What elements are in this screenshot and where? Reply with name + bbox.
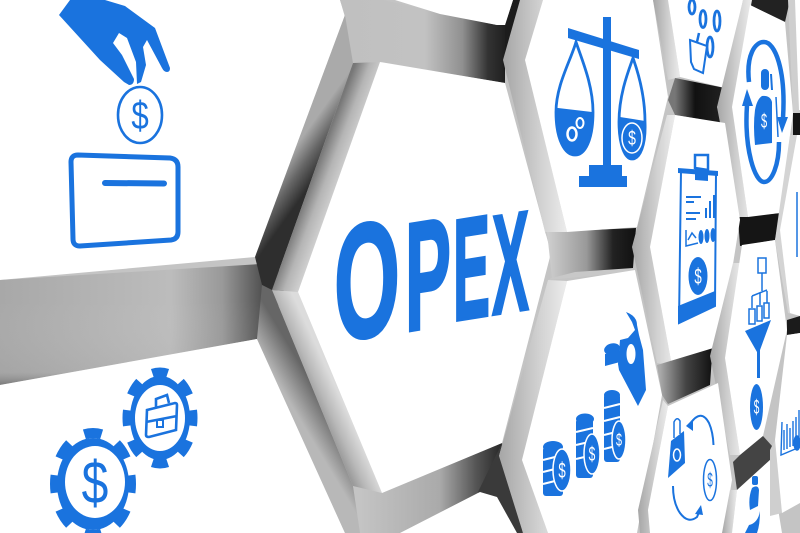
icon: hierarchy funnel: $	[754, 398, 759, 419]
icon: coin stacks and hand	[543, 312, 646, 496]
heading: OPEX: E	[453, 184, 490, 352]
icon: money bag over hand	[745, 476, 760, 533]
heading: OPEX: O	[334, 184, 400, 377]
panel: top band beside scale hexagon	[499, 115, 667, 460]
panel: bottom centre hexagon	[400, 492, 517, 533]
panel: top right hexagon	[788, 0, 800, 113]
icon: balance scale: $	[628, 126, 636, 150]
icon: right edge document	[796, 192, 798, 257]
icon: coin stacks and hand: $	[589, 444, 595, 466]
panel: dark gap below funnel hexagon	[733, 436, 772, 490]
icon: gears with briefcase and dollar	[55, 372, 193, 533]
icon: clipboard report: $	[694, 265, 702, 289]
panel: coin stacks hexagon	[499, 270, 662, 533]
panel: bottom-left hexagon	[0, 339, 345, 533]
panel: dark gap right of pot hexagon	[668, 0, 800, 335]
icon: hierarchy funnel	[745, 258, 771, 430]
icon: coins and pot	[689, 0, 720, 73]
panel: money cycle hexagon	[717, 0, 793, 217]
icon: gears with briefcase and dollar: $	[82, 449, 108, 516]
panel: chart hexagon	[770, 333, 800, 516]
panel: right edge hexagon	[775, 135, 800, 316]
panel: pot hexagon	[653, 0, 743, 88]
icon: coin stacks and hand: $	[558, 459, 566, 483]
panel: central hexagon: X	[492, 182, 529, 346]
panel: central hexagon	[272, 62, 551, 493]
panel: top band above central hexagon	[340, 0, 525, 83]
panel: scale hexagon	[503, 0, 668, 232]
panel: gutters around central hexagon	[255, 15, 523, 533]
panel: top-left hexagon	[0, 0, 345, 280]
icon: shopping bag and coin cycle	[668, 416, 716, 520]
panel: left connecting bar	[0, 263, 285, 385]
heading: OPEX: P	[405, 185, 451, 365]
icon: hand dropping coin	[59, 0, 170, 143]
icon: shopping bag and coin cycle: $	[707, 471, 713, 492]
panel: dark gap below clipboard hexagon	[657, 346, 720, 404]
icon: balance scale	[556, 17, 645, 187]
panel: hand hexagon	[722, 460, 782, 533]
icon: bar chart	[781, 410, 800, 455]
icon: money bag cycle	[742, 42, 788, 182]
icon: money bag cycle: $	[761, 111, 767, 133]
panel: top centre hexagon	[395, 0, 513, 25]
panel: bag cycle hexagon	[638, 383, 732, 533]
icon: donation box	[71, 155, 178, 246]
icon: hand dropping coin: $	[131, 93, 149, 138]
panel: funnel hexagon	[710, 240, 787, 455]
icon: coin stacks and hand: $	[616, 431, 622, 451]
icon: clipboard report	[678, 155, 718, 323]
panel: clipboard hexagon	[632, 115, 740, 366]
